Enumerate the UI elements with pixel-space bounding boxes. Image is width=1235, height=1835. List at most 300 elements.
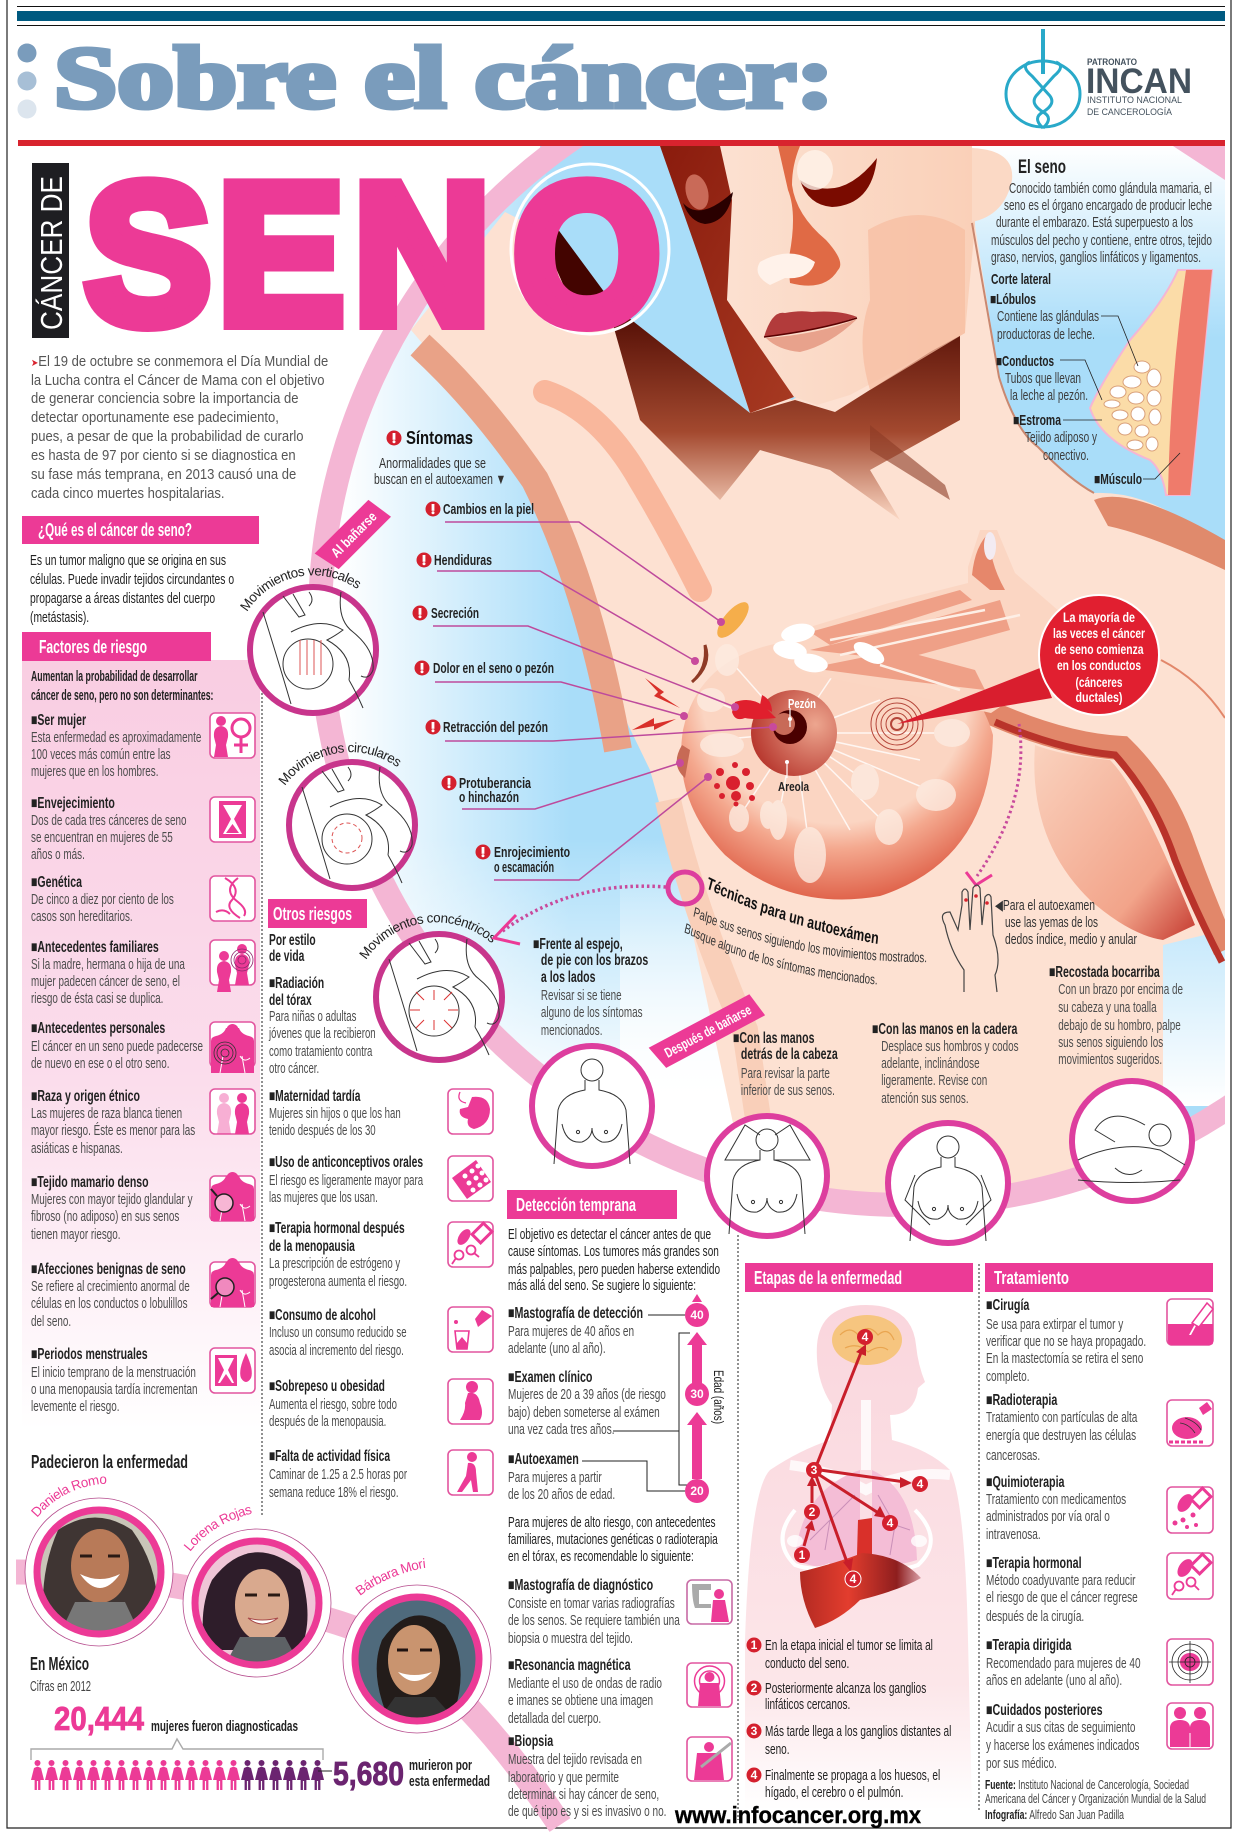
dark hair wedge <box>555 230 604 296</box>
neck streak <box>870 425 950 500</box>
stage list: 2 <box>751 1681 758 1695</box>
logo: INCAN: INSTITUTO NACIONAL <box>1087 95 1182 106</box>
second breast <box>1034 745 1195 940</box>
otros text: ■Falta de actividad física <box>269 1447 390 1465</box>
text: frente al espejo <box>533 935 648 1039</box>
stage list: linfáticos cercanos. <box>765 1695 850 1713</box>
tratamiento text: En la mastectomía se retira el seno <box>986 1349 1143 1367</box>
factores text: Se refiere al crecimiento anormal de <box>31 1278 190 1295</box>
callout: enrojecimiento: Enrojecimiento <box>494 845 570 861</box>
ear <box>972 148 1012 222</box>
shoulder salmon <box>1094 497 1225 570</box>
detección text: Muestra del tejido revisada en <box>508 1750 642 1768</box>
detección text: ■Mastografía de detección <box>508 1304 643 1322</box>
bracket <box>31 1739 323 1760</box>
photo: Bárbara Mori <box>342 1558 492 1734</box>
icon: walking <box>448 1450 493 1495</box>
icon: surgery <box>1167 1299 1213 1345</box>
tratamiento text: Acudir a sus citas de seguimiento <box>986 1718 1136 1736</box>
text: recostada: ■Recostada bocarriba <box>1049 963 1160 981</box>
otros text: ■Uso de anticonceptivos orales <box>269 1153 423 1171</box>
tratamiento text: cancerosas. <box>986 1446 1040 1464</box>
icon: benign <box>210 1258 255 1307</box>
callout: secreción: Secreción <box>431 606 479 622</box>
detección text: e imanes se obtiene una imagen <box>508 1691 653 1709</box>
background blue <box>362 146 1225 1117</box>
tratamiento text: Tratamiento con partículas de alta <box>986 1408 1138 1426</box>
tratamiento text: Método coadyuvante para reducir <box>986 1571 1136 1589</box>
icon: after care <box>1167 1703 1213 1749</box>
text: qué es: (metástasis). <box>30 608 89 625</box>
detección text: determinar si hay cáncer de seno, <box>508 1785 659 1803</box>
stage list: Posteriormente alcanza los ganglios <box>765 1679 926 1697</box>
factores lead <box>31 668 213 704</box>
factores text: Si la madre, hermana o hija de una <box>31 956 186 973</box>
SENO headline: SENO <box>85 143 661 366</box>
factores text: El inicio temprano de la menstruación <box>31 1364 196 1381</box>
text: frente al espejo: Revisar si se tiene <box>541 987 622 1004</box>
otros text: Por estilo <box>269 931 316 949</box>
text: manos cadera <box>872 1020 1019 1107</box>
detección text: en el tórax, es recomendable lo siguiente: <box>508 1547 694 1565</box>
tratamiento text: intravenosa. <box>986 1525 1041 1543</box>
tratamiento text: después de la cirugía. <box>986 1607 1084 1625</box>
factores text: ■Antecedentes familiares <box>31 938 159 956</box>
stage badges: 4 <box>862 1330 869 1344</box>
detección text: El objetivo es detectar el cáncer antes de que <box>508 1225 711 1243</box>
detección text: más palpables, pero pueden haberse extendido <box>508 1260 720 1278</box>
callout: ductal: La mayoría de <box>1063 609 1135 625</box>
factores text: El cáncer en un seno puede padecerse <box>31 1038 203 1055</box>
icon: personal target <box>210 1022 255 1073</box>
otros text: otro cáncer. <box>269 1060 319 1077</box>
stage list: Finalmente se propaga a los huesos, el <box>765 1766 940 1784</box>
otros text <box>268 931 423 1501</box>
otros text: progesterona aumenta el riesgo. <box>269 1273 407 1290</box>
text: recostada: su cabeza y una toalla <box>1058 999 1157 1016</box>
detección text: biopsia o muestra del tejido. <box>508 1629 633 1647</box>
otros text: ■Sobrepeso u obesidad <box>269 1377 385 1395</box>
symptom: lump <box>677 745 690 778</box>
nose <box>778 146 840 286</box>
detección text: Para mujeres de 40 años en <box>508 1322 634 1340</box>
figure: frente al espejo <box>532 1046 652 1166</box>
callout: ductal: en los conductos <box>1057 657 1141 673</box>
intro text: de generar conciencia sobre la importancia de <box>31 389 299 406</box>
text: manos cabeza: ■Con las manos <box>733 1029 814 1047</box>
body skin <box>411 212 1225 1250</box>
diagram labels: Contiene las glándulas <box>997 309 1099 325</box>
icon: mammography <box>687 1580 732 1624</box>
callout: enrojecimiento <box>476 773 712 880</box>
panel: tratamiento <box>985 1263 1213 1772</box>
técnicas ring <box>668 872 702 904</box>
photo: Lorena Rojas <box>182 1507 332 1678</box>
dotted divider 1 <box>261 693 263 1516</box>
factores text: ■Afecciones benignas de seno <box>31 1260 186 1278</box>
callout: ductal: las veces el cáncer <box>1053 625 1145 641</box>
text: el seno <box>991 181 1212 266</box>
detección text: adelante (uno al año). <box>508 1339 606 1357</box>
stage badges: 2 <box>809 1505 816 1519</box>
circle: movimientos concéntricos: Movimientos concéntricos <box>359 915 494 960</box>
stage badges: 4 <box>850 1572 857 1586</box>
otros text: semana reduce 18% el riesgo. <box>269 1484 399 1501</box>
stat: 5,680: 5,680 <box>333 1755 404 1792</box>
connecting ring <box>320 35 1235 1205</box>
tratamiento text: Recomendado para mujeres de 40 <box>986 1654 1141 1672</box>
factores text <box>31 711 203 1415</box>
factores text: Dos de cada tres cánceres de seno <box>31 812 186 829</box>
icon: overweight <box>448 1379 493 1424</box>
text: recostada <box>1049 963 1183 1068</box>
tratamiento text: y hacerse los exámenes indicados <box>986 1736 1139 1754</box>
callout: ductal: (cánceres <box>1076 674 1123 690</box>
forehead highlight <box>797 150 833 190</box>
tratamiento text: por sus médico. <box>986 1754 1057 1772</box>
intro text: pues, a pesar de que la probabilidad de curarlo <box>31 427 304 444</box>
diagram labels: la leche al pezón. <box>1010 388 1088 404</box>
intro text: es hasta de 97 por ciento si se diagnostica en <box>31 446 296 463</box>
tratamiento text: ■Cuidados posteriores <box>986 1701 1103 1719</box>
factores text: Mujeres con mayor tejido glandular y <box>31 1191 193 1208</box>
síntomas heading: Síntomas <box>406 428 473 448</box>
callout: cambios en la piel: Cambios en la piel <box>443 502 534 518</box>
tratamiento text: administrados por vía oral o <box>986 1507 1110 1525</box>
text: recostada: sus senos siguiendo los <box>1058 1034 1163 1051</box>
factores text: de nuevo en ese o el otro seno. <box>31 1055 169 1072</box>
icon: woman and venus <box>210 713 255 758</box>
figure: recostada <box>1072 1081 1192 1201</box>
diagram labels: Tejido adiposo y <box>1025 430 1098 446</box>
técnicas dotted arrows <box>494 724 1021 944</box>
stage list: 3 <box>751 1724 758 1738</box>
detección text: de los 20 años de edad. <box>508 1485 615 1503</box>
tag: Al bañarse <box>315 497 391 573</box>
factores text: se encuentran en mujeres de 55 <box>31 829 173 846</box>
lips <box>764 311 857 352</box>
detección text: detallada del cuerpo. <box>508 1709 601 1727</box>
diagram labels: ■Conductos <box>996 353 1054 370</box>
tratamiento text: completo. <box>986 1367 1030 1385</box>
arm stripes <box>420 345 770 1200</box>
skeleton <box>790 1400 950 1490</box>
tratamiento text: verificar que no se haya propagado. <box>986 1332 1146 1350</box>
factores text: mayor riesgo. Éste es menor para las <box>31 1121 195 1139</box>
icon: dense tissue <box>210 1172 255 1221</box>
factores text: 100 veces más común entre las <box>31 746 171 763</box>
callout: hendiduras <box>416 552 699 665</box>
diagram labels: Tubos que llevan <box>1005 371 1081 387</box>
detección text: Consiste en tomar varias radiografías <box>508 1594 675 1612</box>
text: hand tip: use las yemas de los <box>1005 915 1098 931</box>
tratamiento text <box>986 1296 1146 1772</box>
otros text: del tórax <box>269 991 312 1009</box>
callout: protuberancia: Protuberancia <box>459 776 532 792</box>
face <box>670 146 975 413</box>
tag: después de bañarse <box>649 992 765 1071</box>
heading: etapas: Etapas de la enfermedad <box>754 1268 902 1288</box>
text: manos cabeza: detrás de la cabeza <box>741 1045 838 1063</box>
chart: edad arrows: 20 <box>690 1484 704 1498</box>
arm band <box>980 660 1225 962</box>
tratamiento text: ■Radioterapia <box>986 1391 1058 1409</box>
tratamiento text: Se usa para extirpar el tumor y <box>986 1315 1124 1333</box>
text: manos cadera: ■Con las manos en la cadera <box>872 1020 1018 1038</box>
chart: edad arrows: Edad (años) <box>711 1370 727 1424</box>
decorative dots <box>18 44 36 118</box>
heading: tratamiento: Tratamiento <box>994 1268 1069 1288</box>
pointer line <box>318 1770 332 1772</box>
chart: edad arrows: 40 <box>690 1308 704 1322</box>
heading: etapas <box>745 1263 973 1292</box>
tratamiento text: ■Terapia dirigida <box>986 1636 1072 1654</box>
factores text: células en los conductos o lobulillos <box>31 1295 188 1312</box>
detección text: ■Resonancia magnética <box>508 1656 631 1674</box>
otros text: de la menopausia <box>269 1237 355 1255</box>
panel: etapas de la enfermedad <box>745 1263 973 1810</box>
callout: ductal <box>897 595 1159 724</box>
text: frente al espejo: mencionados. <box>541 1022 602 1039</box>
otros text: Para niñas o adultas <box>269 1008 356 1025</box>
text: hand tip <box>995 898 1137 948</box>
otros text: ■Consumo de alcohol <box>269 1306 376 1324</box>
tag: después de bañarse: Después de bañarse <box>662 1001 754 1061</box>
text: recostada: debajo de su hombro, palpe <box>1058 1017 1181 1034</box>
otros text: asocia al incremento del riesgo. <box>269 1342 404 1359</box>
body silhouette <box>745 1305 972 1810</box>
areola <box>751 690 837 776</box>
intro text: su fase más temprana, en 2013 causó una de <box>31 465 296 482</box>
factores text: tienen mayor riesgo. <box>31 1226 121 1243</box>
liver <box>800 1553 921 1628</box>
factores text: o una menopausia tardía incrementan <box>31 1381 197 1398</box>
diagram leader lines <box>1060 316 1180 479</box>
text: manos cadera: ligeramente. Revise con <box>881 1072 987 1089</box>
diagram labels: Corte lateral <box>991 271 1051 288</box>
factores text: ■Raza y origen étnico <box>31 1087 140 1105</box>
stage list <box>746 1636 951 1801</box>
detección text <box>508 1225 720 1820</box>
photo: Bárbara Mori: Bárbara Mori <box>355 1558 426 1596</box>
breast glands <box>697 644 970 883</box>
heading: qué es: ¿Qué es el cáncer de seno? <box>38 520 192 540</box>
otros text: de vida <box>269 947 305 965</box>
text: qué es: células. Puede invadir tejidos circundantes o <box>30 570 234 587</box>
detección text: Para mujeres de alto riesgo, con antecedentes <box>508 1513 716 1531</box>
text: recostada: movimientos sugeridos. <box>1058 1051 1162 1068</box>
factores text: ■Antecedentes personales <box>31 1019 165 1037</box>
text: frente al espejo: de pie con los brazos <box>541 951 648 969</box>
icon: hourglass <box>210 797 255 842</box>
circle: movimientos concéntricos <box>359 915 505 1063</box>
symptom: redness <box>714 762 755 806</box>
chart: edad arrows: 30 <box>690 1387 704 1401</box>
síntomas heading: Anormalidades que se <box>379 456 486 472</box>
diagram labels: ■Lóbulos <box>990 291 1036 308</box>
detección text: bajo) deben someterse al exámen <box>508 1403 660 1421</box>
photo: Daniela Romo: Daniela Romo <box>30 1476 106 1517</box>
arrow heads <box>805 1344 912 1572</box>
callout: dolor <box>414 660 688 720</box>
callout: retracción: Retracción del pezón <box>443 720 548 736</box>
logo: INCAN: DE CANCEROLOGÍA <box>1087 107 1173 118</box>
otros text: después de la menopausia. <box>269 1413 386 1430</box>
otros text: las mujeres que los usan. <box>269 1189 378 1206</box>
stage list: conducto del seno. <box>765 1654 849 1672</box>
figure: manos en la cabeza <box>707 1116 827 1236</box>
detección text: ■Biopsia <box>508 1732 554 1750</box>
main breast <box>681 640 993 900</box>
text: manos cadera: Desplace sus hombros y codos <box>881 1038 1019 1055</box>
stage list: 4 <box>751 1768 758 1782</box>
factores text: ■Periodos menstruales <box>31 1345 148 1363</box>
nose highlight <box>758 254 815 285</box>
symptom: skin change <box>717 602 749 638</box>
callout: hendiduras: Hendiduras <box>434 553 492 569</box>
logo: INCAN <box>1006 29 1192 128</box>
stage list: Más tarde llega a los ganglios distantes al <box>765 1722 951 1740</box>
técnicas text: Busque alguno de los síntomas mencionados. <box>684 923 877 984</box>
diagram labels: conectivo. <box>1043 448 1089 464</box>
callout: enrojecimiento: o escamación <box>494 860 554 876</box>
factores text: ■Genética <box>31 873 82 891</box>
factores text: Las mujeres de raza blanca tienen <box>31 1105 182 1122</box>
circles: después de bañarse <box>532 1046 1192 1243</box>
detección text: de los senos. Se requiere también una <box>508 1611 681 1629</box>
text: hand tip: dedos índice, medio y anular <box>1005 932 1137 948</box>
symptom: discharge <box>732 695 776 719</box>
CÁNCER DE tag: CÁNCER DE <box>34 176 69 330</box>
chart: edad arrows <box>582 1294 727 1503</box>
detección text: una vez cada tres años. <box>508 1420 615 1438</box>
icon: fetus <box>448 1089 493 1134</box>
tratamiento text: ■Quimioterapia <box>986 1473 1065 1491</box>
text: frente al espejo: alguno de los síntomas <box>541 1004 643 1021</box>
stage badges: 1 <box>799 1548 806 1562</box>
heading: detección: Detección temprana <box>516 1195 637 1215</box>
nipple <box>773 710 807 744</box>
stage list: seno. <box>765 1740 790 1758</box>
icon: family target <box>210 940 255 992</box>
callout: retracción <box>426 720 777 741</box>
photo: Daniela Romo <box>24 1476 174 1646</box>
otros text: como tratamiento contra <box>269 1043 372 1060</box>
diagram labels <box>990 271 1142 488</box>
photo: Lorena Rojas: Lorena Rojas <box>184 1507 252 1552</box>
text: cifras: Cifras en 2012 <box>30 1679 91 1695</box>
diagram labels: ■Estroma <box>1013 412 1061 429</box>
panel: padecieron <box>16 1452 570 1832</box>
target ductal <box>871 698 923 750</box>
icon: MRI <box>687 1663 732 1707</box>
intro text: la Lucha contra el Cáncer de Mama con el objetivo <box>31 371 325 388</box>
factores lead: Aumentan la probabilidad de desarrollar <box>31 668 198 685</box>
heading: otros <box>268 899 367 928</box>
left eye <box>682 172 733 224</box>
heading: qué es <box>22 516 259 544</box>
metastasis arrows <box>804 1350 905 1565</box>
heart <box>857 1518 872 1575</box>
circle: movimientos circulares: Movimientos circulares <box>278 742 400 786</box>
icon: two women <box>210 1089 255 1134</box>
neck shadow <box>614 319 960 520</box>
factores text: riesgo de ésta casi se duplica. <box>31 990 163 1007</box>
stage badges: 3 <box>811 1463 818 1477</box>
factores text: fibroso (no adiposo) en sus senos <box>31 1208 179 1225</box>
icon: menstrual <box>210 1348 255 1393</box>
callout: secreción <box>412 606 739 711</box>
detección text: familiares, mutaciones genéticas o radioterapia <box>508 1530 718 1548</box>
pink band <box>16 1572 560 1825</box>
heading: factores: Factores de riesgo <box>39 637 147 657</box>
icon: alcohol <box>448 1307 493 1352</box>
logo: INCAN: PATRONATO <box>1087 57 1137 68</box>
text: frente al espejo: a los lados <box>541 968 595 986</box>
hand <box>773 530 1058 713</box>
tag: Al bañarse: Al bañarse <box>327 508 380 561</box>
label: areola <box>778 760 810 794</box>
detección text: ■Autoexamen <box>508 1450 579 1468</box>
síntomas heading: buscan en el autoexamen ▼ <box>374 472 506 488</box>
circle: movimientos verticales: Movimientos verticales <box>240 567 360 611</box>
cheek shade <box>862 215 965 390</box>
factores text: ■Tejido mamario denso <box>31 1173 149 1191</box>
factores lead: cáncer de seno, pero no son determinantes: <box>31 687 213 704</box>
síntomas heading <box>374 428 506 488</box>
label: areola: Areola <box>778 779 810 794</box>
otros text: Incluso un consumo reducido se <box>269 1324 407 1341</box>
symptom: dimple <box>692 645 707 682</box>
factores text: Esta enfermedad es aproximadamente <box>31 729 201 746</box>
heading: detección <box>507 1190 677 1219</box>
movement circles band and tags <box>240 500 505 1063</box>
callout: dolor: Dolor en el seno o pezón <box>433 661 554 677</box>
blue wedge <box>540 146 750 413</box>
callout: cambios en la piel <box>426 502 725 626</box>
tratamiento text: el riesgo de que el cáncer regrese <box>986 1588 1138 1606</box>
icon: hormonal <box>1167 1553 1213 1599</box>
detección text: cause síntomas. Los tumores más grandes son <box>508 1242 719 1260</box>
label: pezón <box>788 696 816 727</box>
otros text: tenido después de los 30 <box>269 1122 376 1139</box>
panel: factores de riesgo <box>22 632 260 1430</box>
callout: ductal: de seno comienza <box>1054 641 1144 657</box>
heading: el seno: El seno <box>1018 157 1066 178</box>
header rules <box>17 6 1225 26</box>
label: pezón: Pezón <box>788 696 816 711</box>
neck edge <box>972 223 1094 493</box>
text: diagnosticadas: mujeres fueron diagnosticadas <box>151 1718 298 1735</box>
panel: en méxico <box>30 1654 490 1792</box>
heading: tratamiento <box>985 1263 1213 1292</box>
symptom callouts <box>412 502 777 880</box>
detección text: Mediante el uso de ondas de radio <box>508 1674 662 1692</box>
stage badges: 4 <box>887 1516 894 1530</box>
text: manos cadera: atención sus senos. <box>881 1090 969 1107</box>
stage badges <box>794 1329 928 1587</box>
tratamiento text: Tratamiento con medicamentos <box>986 1490 1126 1508</box>
intro text: ➤El 19 de octubre se conmemora el Día Mundial de <box>31 352 328 369</box>
factores text: del seno. <box>31 1313 71 1330</box>
heading: factores <box>22 632 211 661</box>
text: manos cadera: adelante, inclinándose <box>881 1055 980 1072</box>
callout: protuberancia: o hinchazón <box>459 790 519 806</box>
detección text: laboratorio y que permite <box>508 1768 619 1786</box>
diagram: corte lateral <box>1090 270 1212 495</box>
brain <box>832 1315 902 1365</box>
detección text: Mujeres de 20 a 39 años (de riesgo <box>508 1385 666 1403</box>
